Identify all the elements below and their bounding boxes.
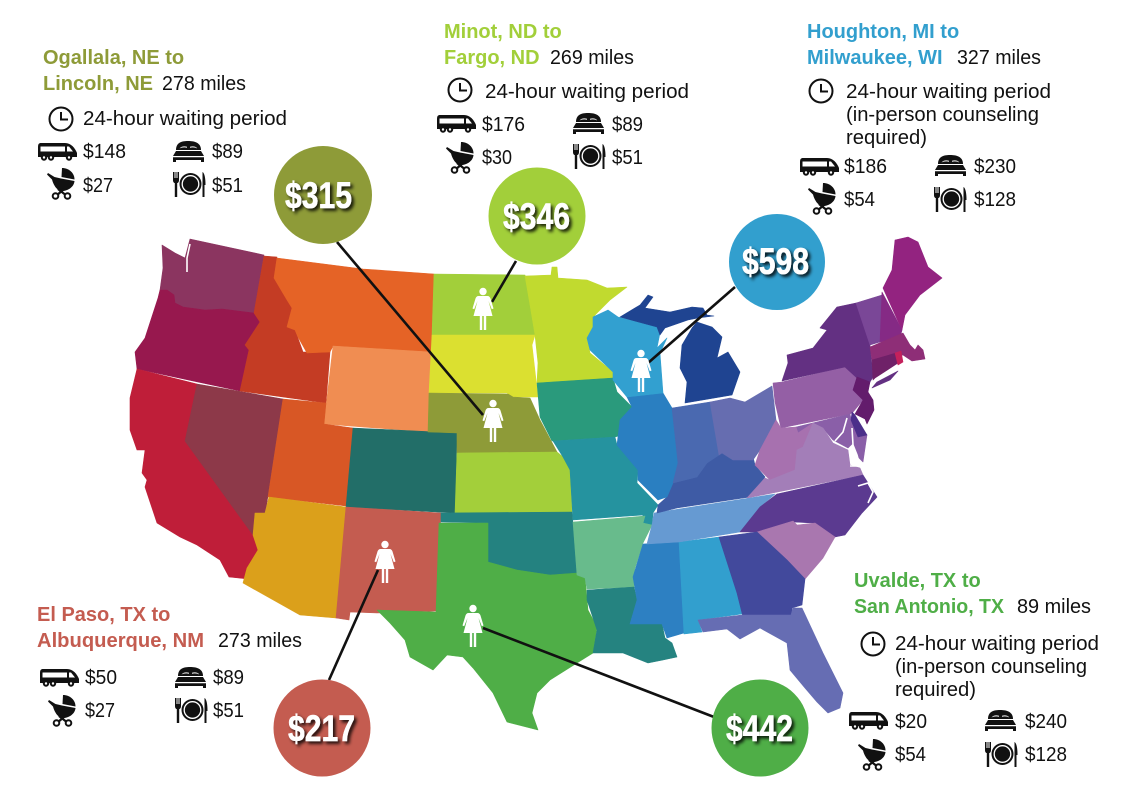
state: Kansas [455,452,572,513]
icon: bus [437,115,476,133]
state: Kentucky [657,453,765,513]
waiting period: 24-hour waiting period [83,108,287,130]
icon: stroller [48,695,76,726]
icon: clock [50,108,72,130]
icon: clock [448,78,472,102]
state: Alabama [679,537,742,634]
callout: $346 [488,168,586,264]
state: Mississippi [630,542,684,638]
callout: $217 [274,680,370,776]
waiting period: 24-hour waiting period [846,81,1051,103]
icon: clock [810,80,832,102]
callout: $598 [729,214,825,310]
panel: Ogallala to Lincoln [38,47,287,199]
heading: Milwaukee, WI [807,47,943,69]
state: Indiana [672,402,719,483]
icon: bus [800,158,839,176]
icon: bed [985,710,1016,731]
heading: Minot, ND to [444,21,562,43]
icon: bus [40,669,79,687]
state: Utah [268,399,353,506]
state: South Dakota [429,335,538,397]
bus cost: $20 [895,711,927,733]
state: California [130,369,258,579]
state: Michigan [620,295,740,403]
icon: woman New Mexico [374,541,396,583]
heading: Albuquerque, NM [37,630,204,652]
state: Arizona [243,497,346,618]
state: South Carolina [757,521,835,579]
state: New Hampshire [880,292,902,342]
hotel cost: $89 [612,114,643,136]
childcare cost: $27 [85,700,115,722]
state: New York [782,303,898,388]
waiting period: 24-hour waiting period [485,81,689,103]
icon: bed [573,113,604,134]
icon: bed [175,667,206,688]
heading: Houghton, MI to [807,21,959,43]
bus cost: $50 [85,667,117,689]
icon: plate [573,144,606,169]
state: Ohio [710,386,776,460]
line: Houghton [648,287,735,363]
state: Minnesota [525,267,627,383]
callout: $442 [712,680,808,776]
state: Illinois [617,393,678,500]
bus cost: $186 [844,156,887,178]
hotel cost: $240 [1025,711,1067,733]
childcare cost: $54 [844,189,875,211]
icon: plate [985,742,1018,767]
callout: $315 [274,146,372,244]
icon: stroller [858,739,886,770]
heading: San Antonio, TX [854,596,1005,618]
childcare cost: $30 [482,147,512,169]
icon: stroller [47,168,74,199]
distance: 269 miles [550,47,634,69]
state: Massachusetts [870,333,925,361]
state: Louisiana [587,587,677,663]
state: Pennsylvania [773,367,863,428]
icon: bed [935,155,966,176]
state: New Mexico [336,507,441,620]
icon: bed [173,141,204,162]
state: Nebraska [428,393,557,453]
callout: $217: $217 [288,708,355,749]
callout: $598: $598 [742,241,809,282]
line: Uvalde [483,628,714,717]
distance: 278 miles [162,73,246,95]
state: Virginia [747,423,863,498]
icon: bus [849,712,888,730]
waiting period: 24-hour waiting period [895,633,1099,655]
heading: El Paso, TX to [37,604,170,626]
heading: Fargo, ND [444,47,540,69]
food cost: $51 [612,147,643,169]
map of the United States [130,237,942,730]
state: Rhode Island [895,351,903,365]
hotel cost: $89 [212,141,243,163]
state: Georgia [719,532,805,617]
panel: Uvalde to San Antonio [849,570,1099,770]
state: Colorado [346,428,457,513]
state: Montana [274,258,434,353]
callout: $346: $346 [503,196,570,237]
panel: El Paso to Albuquerque [37,604,302,726]
bus cost: $176 [482,114,525,136]
state: Washington [160,239,264,313]
callout: $315: $315 [285,175,352,216]
bus cost: $148 [83,141,126,163]
childcare cost: $54 [895,744,926,766]
food cost: $51 [213,700,244,722]
state: Texas [377,523,597,730]
connector lines [329,242,735,717]
state: Maine [883,237,942,330]
state: Maryland [796,414,867,462]
waiting period: required) [846,127,927,149]
state: Nevada [185,384,283,535]
distance: 327 miles [957,47,1041,69]
heading: Uvalde, TX to [854,570,981,592]
state: Idaho [240,256,330,403]
waiting period: required) [895,679,976,701]
icon: plate [173,172,206,197]
state: New Jersey [853,377,874,424]
icon: woman Nebraska [482,400,504,442]
icon: stroller [446,142,474,173]
state: Oregon [135,290,260,391]
line: Ogallala [337,242,483,415]
icon: stroller [808,183,836,214]
icon: bus [38,143,77,161]
childcare cost: $27 [83,175,113,197]
state: Delaware [851,412,867,437]
state: Wyoming [324,346,431,432]
icon: woman Wisconsin [630,350,652,392]
callout: $442: $442 [726,708,793,749]
state: North Dakota [432,274,535,335]
panel: Houghton to Milwaukee [800,21,1051,214]
panel: Minot to Fargo [437,21,689,173]
line: Minot [492,261,516,302]
icon: woman North Dakota [472,288,494,330]
icon: plate [175,698,208,723]
state: North Carolina [740,475,877,537]
distance: 273 miles [218,630,302,652]
icon: clock [862,632,884,656]
food cost: $128 [1025,744,1067,766]
waiting period: (in-person counseling [895,656,1087,678]
state: Missouri [553,437,658,525]
hotel cost: $89 [213,667,244,689]
distance: 89 miles [1017,596,1091,618]
state: Tennessee [647,494,775,544]
state: Oklahoma [441,512,577,575]
state: Wisconsin [587,310,667,397]
state: West Virginia [755,420,813,480]
state: Florida [698,608,843,713]
state: Arkansas [573,516,652,589]
state: Vermont [856,295,882,345]
icon: plate [934,187,966,212]
heading: Lincoln, NE [43,73,153,95]
hotel cost: $230 [974,156,1016,178]
heading: Ogallala, NE to [43,47,184,69]
food cost: $51 [212,175,243,197]
line: El Paso [329,570,378,680]
waiting period: (in-person counseling [846,104,1039,126]
state: Iowa [537,378,632,441]
state: Connecticut [872,353,898,380]
icon: woman Texas [462,605,484,647]
food cost: $128 [974,189,1016,211]
